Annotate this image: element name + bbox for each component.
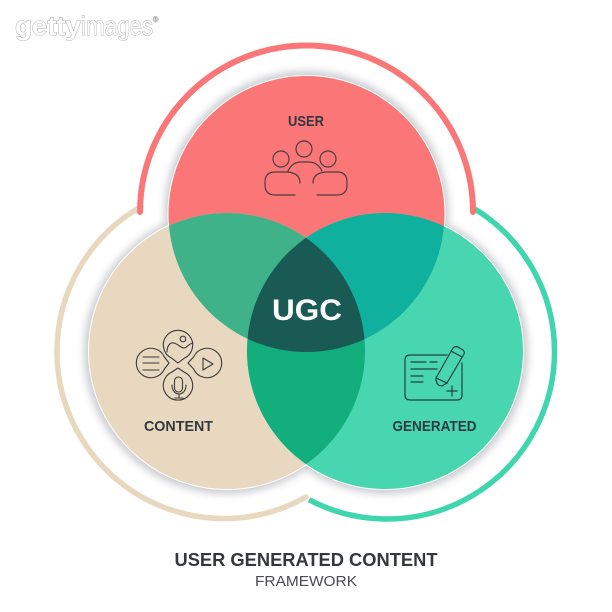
watermark: getty xyxy=(15,11,81,41)
bubble: chat xyxy=(136,348,169,378)
bubble: image xyxy=(163,330,193,363)
circle: user xyxy=(168,76,444,352)
circle shadows xyxy=(84,71,528,494)
icon: document and pencil xyxy=(405,347,464,400)
title: USER GENERATED CONTENT xyxy=(174,550,438,570)
overlap: user and generated xyxy=(306,213,444,340)
icon: users xyxy=(265,141,347,195)
watermark xyxy=(15,11,159,41)
overlap: content and generated xyxy=(247,238,365,464)
watermark: images xyxy=(81,11,153,41)
white halo xyxy=(88,75,524,490)
subtitle: FRAMEWORK xyxy=(255,573,357,590)
bubble: microphone xyxy=(163,368,193,400)
label: content: CONTENT xyxy=(144,418,213,435)
outer ring: beige xyxy=(57,207,306,519)
overlap: user and content xyxy=(169,213,306,339)
outer ring: green xyxy=(309,207,554,519)
bubble: video xyxy=(188,348,222,378)
label: generated: GENERATED xyxy=(392,418,477,435)
venn diagram xyxy=(89,76,523,489)
watermark: ® xyxy=(153,16,159,24)
circle: content xyxy=(89,213,365,489)
label: user: USER xyxy=(288,113,324,130)
overlap: center xyxy=(248,238,364,352)
icon: content bubbles xyxy=(136,330,222,400)
outer ring: red xyxy=(140,46,473,212)
circle: generated xyxy=(247,213,523,489)
center label: UGC xyxy=(272,294,342,327)
